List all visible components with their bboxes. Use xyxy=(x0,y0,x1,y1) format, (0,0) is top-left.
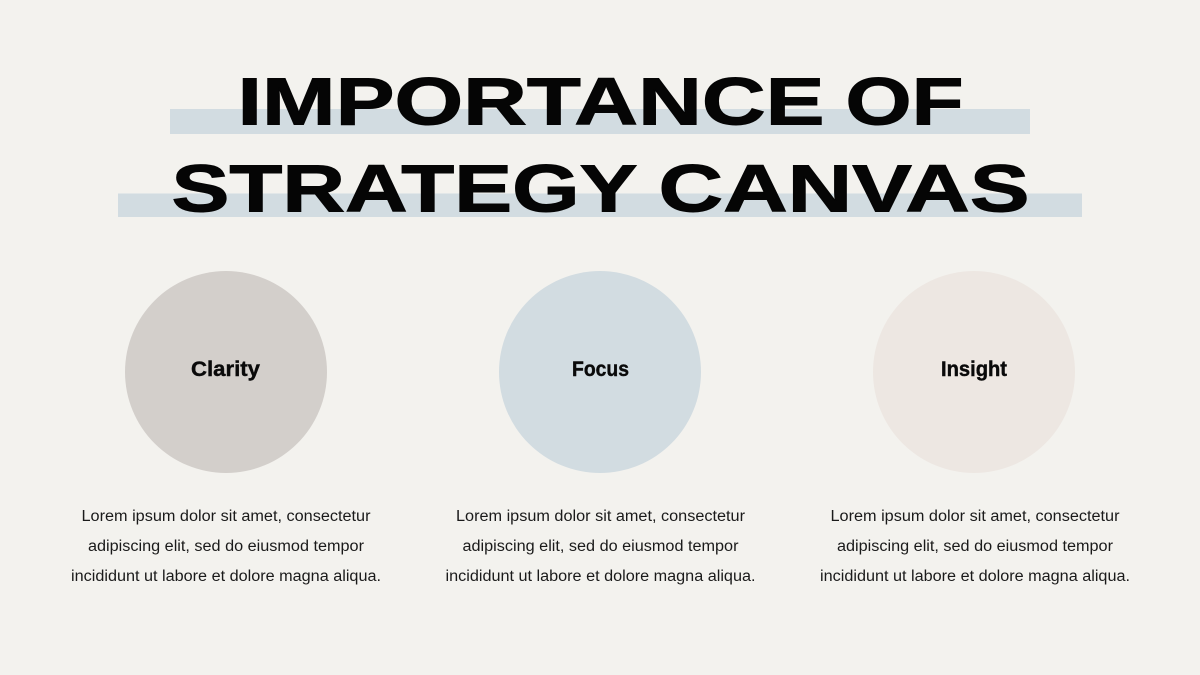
text block: focus description: adipiscing elit, sed do eiusmod tempor xyxy=(462,538,738,555)
text block: insight description: Lorem ipsum dolor sit amet, consectetur xyxy=(830,508,1120,525)
heading: focus: Focus xyxy=(572,358,629,381)
panel: clarity xyxy=(71,271,381,585)
text block: clarity description: Lorem ipsum dolor sit amet, consectetur xyxy=(82,508,370,525)
panel: insight xyxy=(820,271,1130,585)
text block: clarity description: adipiscing elit, sed do eiusmod tempor xyxy=(88,538,364,555)
text block: clarity description: incididunt ut labore et dolore magna aliqua. xyxy=(71,568,381,585)
title line two: CANVAS xyxy=(658,152,1030,226)
text block: insight description: adipiscing elit, sed do eiusmod tempor xyxy=(837,538,1113,555)
text block: insight description: incididunt ut labore et dolore magna aliqua. xyxy=(820,568,1130,585)
text block: focus description: Lorem ipsum dolor sit amet, consectetur xyxy=(456,508,745,525)
text block: focus description xyxy=(446,508,756,585)
text block: insight description xyxy=(820,508,1130,585)
highlight bar: line two xyxy=(118,194,1082,217)
panel: focus xyxy=(446,271,756,585)
title line one: OF xyxy=(846,64,964,140)
circle: clarity xyxy=(125,271,327,473)
title line one: IMPORTANCE xyxy=(238,64,824,140)
text block: focus description: incididunt ut labore et dolore magna aliqua. xyxy=(446,568,756,585)
title with highlight bars xyxy=(118,64,1082,226)
text block: clarity description xyxy=(71,508,381,585)
circle: focus xyxy=(499,271,701,473)
highlight bar: line one xyxy=(170,109,1030,134)
heading: insight: Insight xyxy=(941,358,1007,381)
title line two: STRATEGY xyxy=(172,152,638,226)
heading: clarity: Clarity xyxy=(191,358,260,381)
circle: insight xyxy=(873,271,1075,473)
